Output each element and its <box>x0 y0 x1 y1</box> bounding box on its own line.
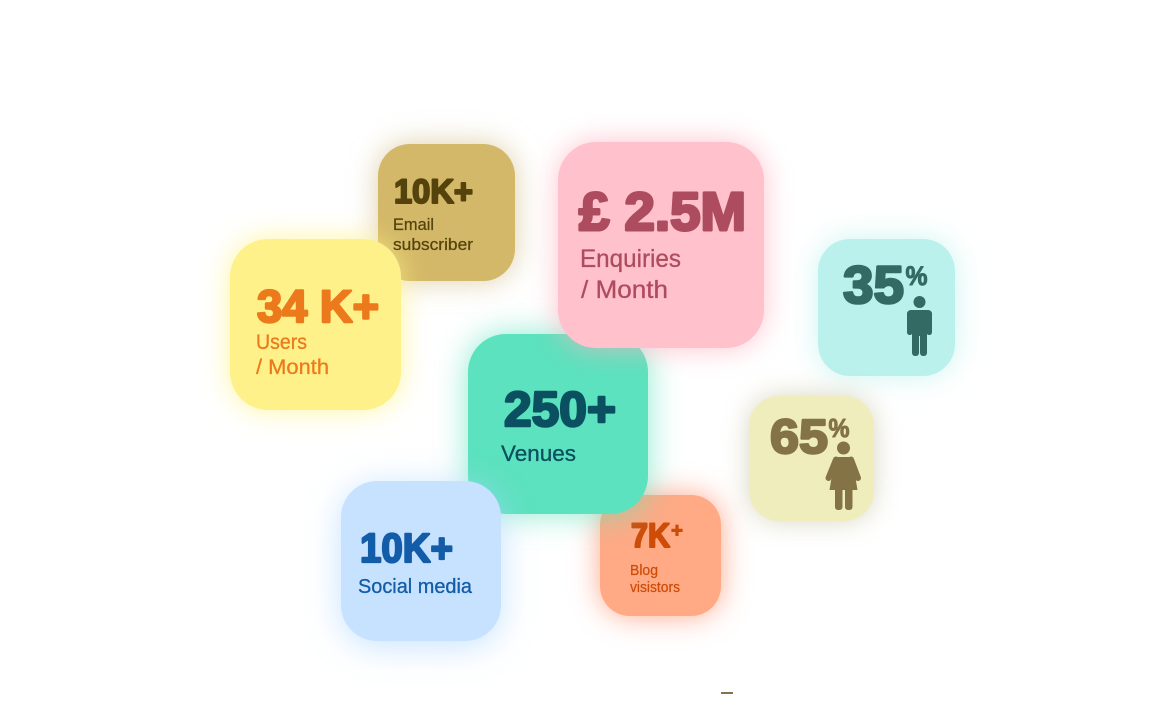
blog label line two: visistors <box>630 579 680 596</box>
blog figure: 7K <box>631 517 670 555</box>
email label line one: Email <box>393 216 434 234</box>
enquiries label line one: Enquiries <box>580 245 681 273</box>
panel: venues card <box>468 334 648 514</box>
venues figure: 250+ <box>504 383 616 437</box>
panel: female share card <box>749 396 874 521</box>
users label line one: Users <box>256 331 307 354</box>
panel: email subscribers card <box>378 144 515 281</box>
panel: male share card <box>818 239 955 376</box>
female figure: 65 <box>770 411 828 464</box>
panel: blog visitors card <box>600 495 721 616</box>
social label: Social media <box>358 576 473 598</box>
email figure: 10K+ <box>394 173 473 211</box>
enquiries label line two: / Month <box>581 276 668 304</box>
social figure: 10K+ <box>360 525 453 571</box>
enquiries figure: £ 2.5M <box>579 182 746 242</box>
users label line two: / Month <box>256 356 329 379</box>
panel: enquiries per month card <box>558 142 764 348</box>
email label line two: subscriber <box>393 236 474 254</box>
icon: man <box>907 296 932 356</box>
blog plus sign: + <box>671 520 683 542</box>
male percent sign: % <box>906 261 928 291</box>
small dash mark <box>721 692 733 694</box>
venues label: Venues <box>501 441 576 466</box>
blog label line one: Blog <box>630 562 658 579</box>
male figure: 35 <box>843 256 904 315</box>
female percent sign: % <box>828 413 850 443</box>
users figure: 34 K+ <box>257 281 379 332</box>
panel: users per month card <box>230 239 401 410</box>
icon: woman <box>828 442 858 510</box>
panel: social media card <box>341 481 501 641</box>
